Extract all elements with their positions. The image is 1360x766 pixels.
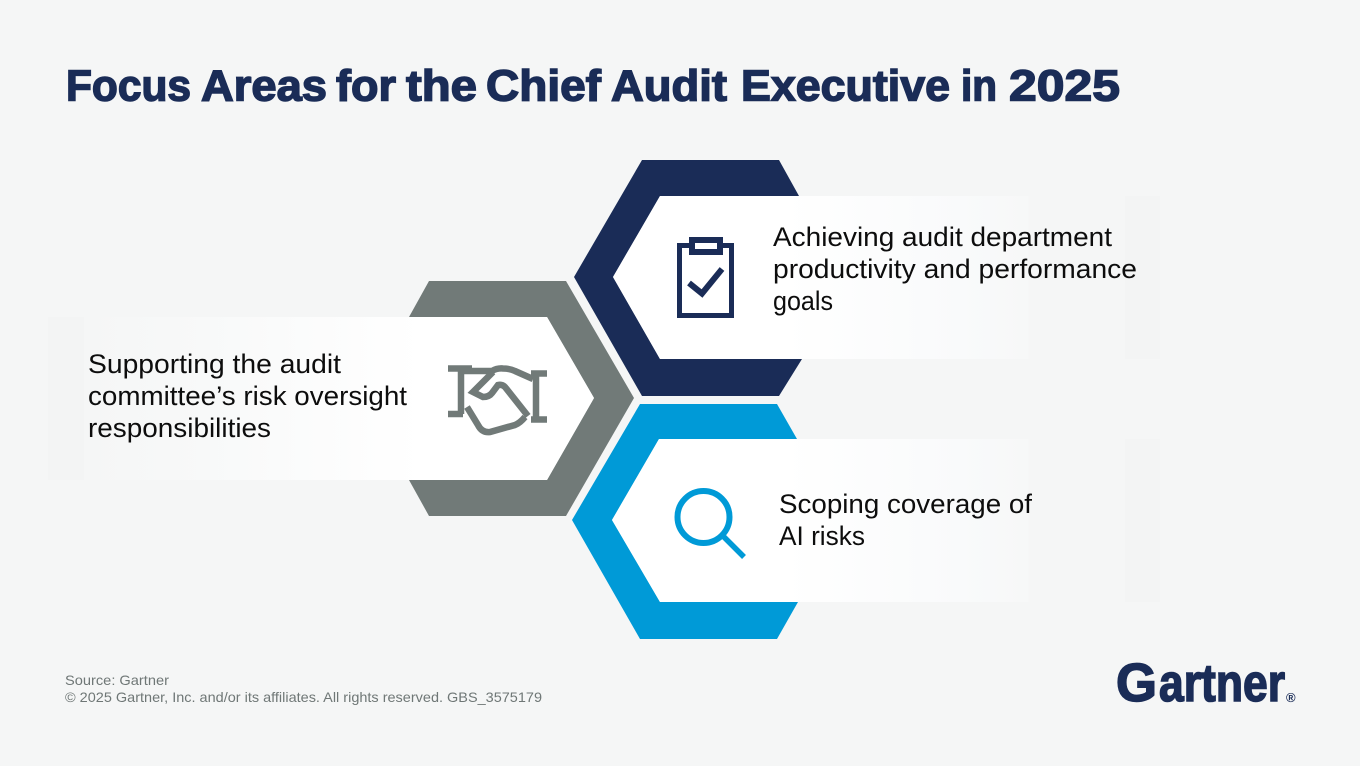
- text: AI risks: AI risks: [779, 521, 865, 551]
- title: 2025: [1009, 62, 1120, 110]
- hexagon frame: blue: [572, 404, 798, 639]
- hexagon frame: navy: [574, 160, 802, 396]
- source note: © 2025 Gartner, Inc. and/or its affiliates. All rights reserved. GBS_3575179: [65, 689, 542, 705]
- text backing: gray panel: [48, 317, 594, 480]
- text: audit committee: committee’s risk oversight: [88, 381, 408, 411]
- source note: Source: Gartner: [65, 672, 169, 688]
- logo: Gartner: [1116, 653, 1296, 713]
- panel: AI risks: [572, 404, 1160, 639]
- icon: handshake: [448, 368, 547, 432]
- title: for: [336, 62, 396, 110]
- text backing: navy panel: [613, 196, 1160, 359]
- text: productivity: productivity and performance: [773, 254, 1137, 284]
- panel: productivity: [574, 160, 1160, 396]
- title: Audit: [611, 62, 727, 110]
- logo: Gartner: artner: [1159, 654, 1285, 713]
- title: Focus: [66, 62, 191, 110]
- text: audit committee: Supporting the audit: [88, 349, 342, 379]
- faint band: [1125, 439, 1160, 602]
- panel: audit committee: [48, 281, 634, 516]
- faint band: [1125, 196, 1160, 359]
- text: AI risks: Scoping coverage of: [779, 489, 1033, 519]
- title: Chief: [486, 62, 601, 110]
- icon: magnifying glass: [678, 491, 744, 557]
- hexagon frame: gray: [409, 281, 634, 516]
- text: productivity: Achieving audit department: [773, 222, 1113, 252]
- title: Areas: [201, 62, 327, 110]
- text: productivity: goals: [773, 286, 833, 316]
- title: Executive: [741, 62, 950, 110]
- icon: clipboard with check: [680, 240, 732, 316]
- logo: Gartner: ®: [1286, 690, 1296, 705]
- title: the: [406, 62, 477, 110]
- text backing: blue panel: [612, 439, 1160, 602]
- faint band: [48, 317, 84, 480]
- text: audit committee: responsibilities: [88, 413, 271, 443]
- title: in: [961, 62, 997, 110]
- logo: Gartner: G: [1116, 653, 1157, 713]
